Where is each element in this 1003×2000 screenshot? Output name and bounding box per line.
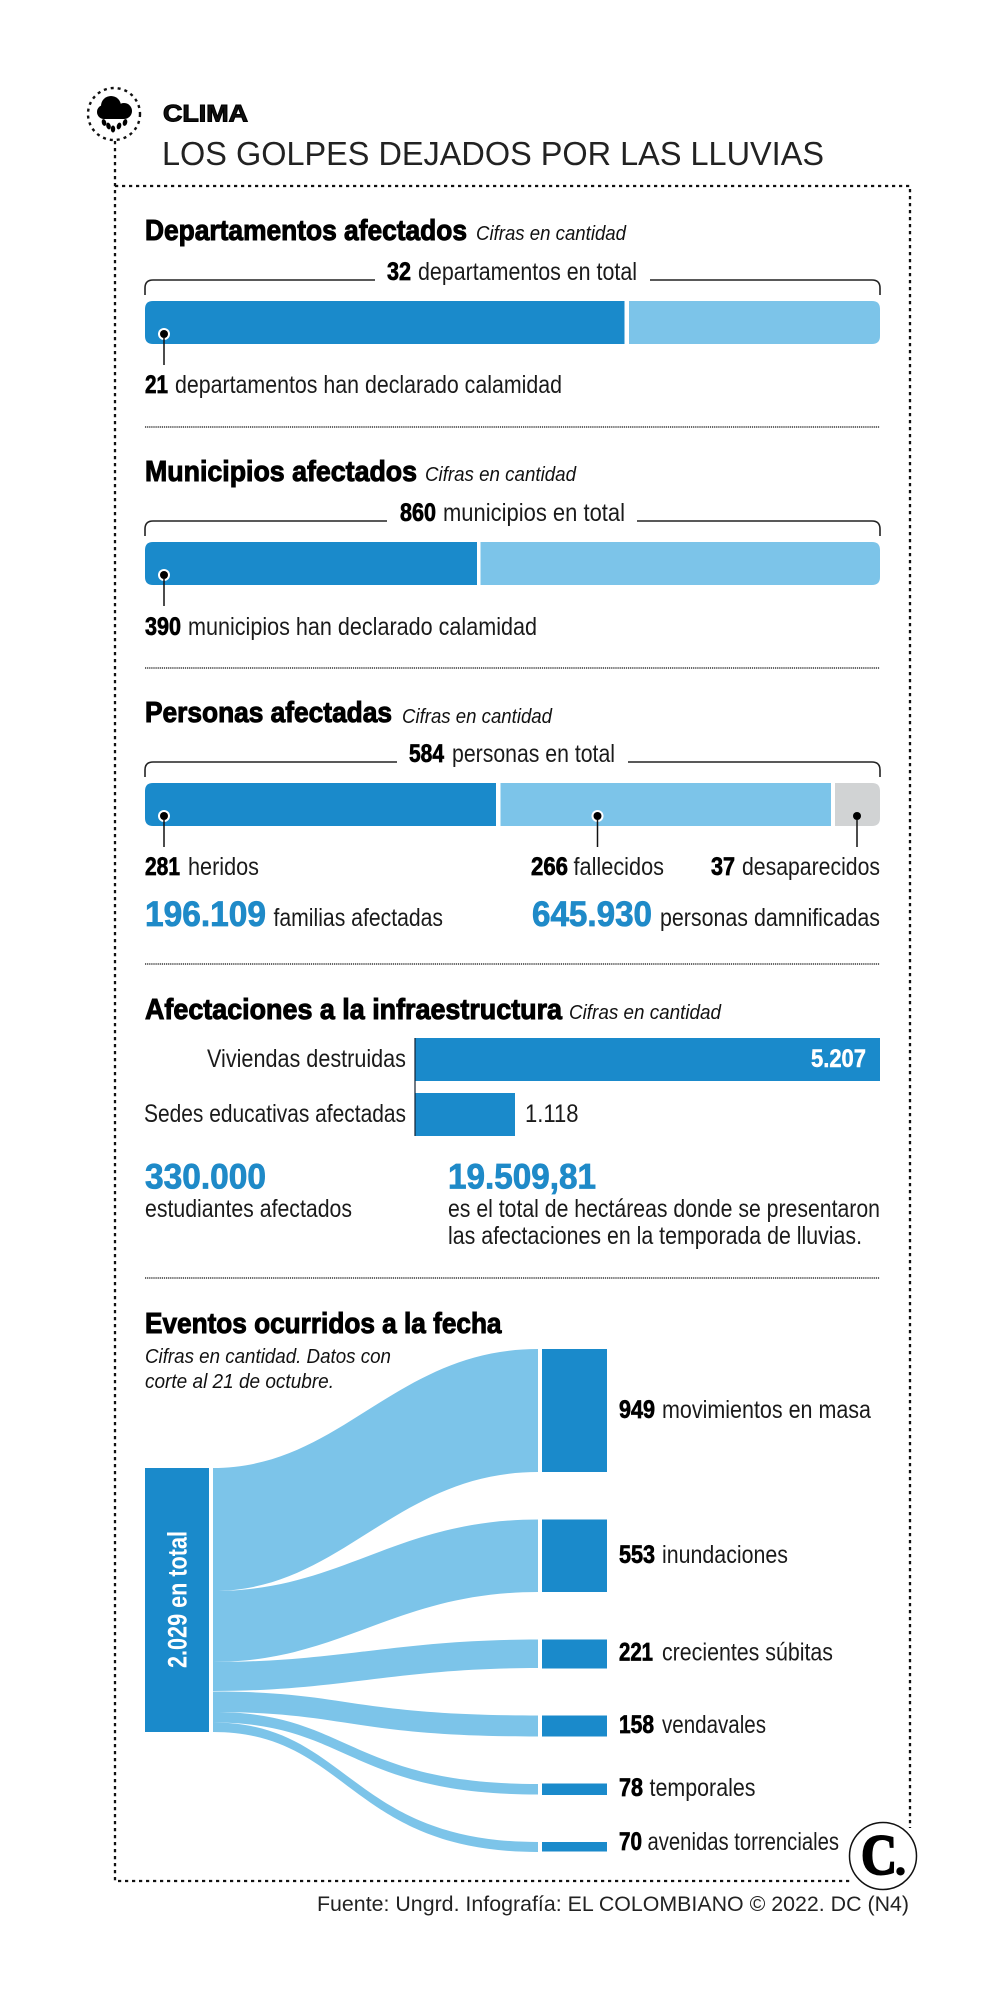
label: heridos: 281 [145,853,180,881]
target: crecientes subitas: crecientes súbitas [662,1638,833,1666]
stacked bar [145,783,880,826]
target: inundaciones: 553 [619,1541,655,1569]
total label: 860 [400,499,436,527]
bar chart: 5.207 [811,1045,866,1073]
logo [850,1822,916,1890]
target: inundaciones [542,1520,788,1592]
total label: personas en total [452,740,615,768]
panel: departamentos afectados [145,215,880,399]
note: Cifras en cantidad [402,706,553,728]
target: temporales: 78 [619,1774,643,1802]
source node [145,1468,209,1732]
label: heridos: heridos [188,853,259,881]
stat: hectareas [448,1158,880,1250]
target: temporales [542,1774,756,1802]
value label: 21 [145,371,168,399]
stat: damnificadas: personas damnificadas [660,904,880,932]
note: Cifras en cantidad [425,464,577,486]
target: movimientos en masa [542,1349,871,1472]
bar chart [144,1038,880,1136]
note [145,1346,391,1393]
stat: familias: 196.109 [145,895,266,934]
label: desaparecidos: desaparecidos [742,853,880,881]
bar chart: Sedes educativas afectadas [144,1100,406,1128]
title: LOS GOLPES DEJADOS POR LAS LLUVIAS [162,136,824,173]
logo: . [894,1830,907,1887]
note: corte al 21 de octubre. [145,1371,334,1393]
source node: 2.029 en total [162,1531,192,1668]
total label: municipios en total [443,499,625,527]
kicker: CLIMA [163,100,248,128]
target: avenidas torrenciales: avenidas torrenciales [648,1828,839,1856]
heading: Personas afectadas [145,697,392,729]
label: fallecidos: 266 [531,853,568,881]
marker [158,569,170,606]
stat: damnificadas [532,895,880,934]
stat: hectareas: es el total de hectáreas donde se presentaron [448,1195,880,1223]
value label: departamentos han declarado calamidad [175,371,562,399]
total label [409,740,615,768]
markers [158,810,861,847]
target: movimientos en masa: 949 [619,1396,655,1424]
target: avenidas torrenciales: 70 [619,1828,642,1856]
icon: rain cloud [88,88,140,140]
bar chart: Viviendas destruidas [207,1045,406,1073]
stat: estudiantes: 330.000 [145,1158,266,1196]
target: inundaciones: inundaciones [662,1541,788,1569]
target: vendavales: 158 [619,1711,654,1739]
target: crecientes subitas: 221 [619,1638,653,1666]
panel: infraestructura [144,994,880,1250]
stat: estudiantes: estudiantes afectados [145,1195,352,1223]
marker [158,328,170,365]
stat: hectareas: 19.509,81 [448,1158,596,1196]
value label: municipios han declarado calamidad [188,613,537,641]
value label: 390 [145,613,181,641]
source credit: Fuente: Ungrd. Infografía: EL COLOMBIANO © 2022. DC (N4) [317,1893,909,1916]
label: desaparecidos: 37 [711,853,735,881]
label: fallecidos: fallecidos [574,853,664,881]
heading: Eventos ocurridos a la fecha [145,1308,502,1340]
sankey flows [213,1349,538,1852]
panel: municipios afectados [145,456,880,641]
stacked bar [145,542,880,585]
note: Cifras en cantidad [476,223,627,245]
stat: familias [145,895,443,934]
total label: departamentos en total [418,258,637,286]
stat: familias: familias afectadas [274,904,443,932]
heading: Departamentos afectados [145,215,467,247]
stat: estudiantes [145,1158,352,1223]
panel: personas afectadas [145,697,880,934]
stacked bar [145,301,880,344]
heading: Afectaciones a la infraestructura [145,994,563,1026]
heading: Municipios afectados [145,456,417,488]
target: vendavales: vendavales [662,1711,766,1739]
stat: damnificadas: 645.930 [532,895,652,934]
total label: 584 [409,740,444,768]
panel: eventos [145,1308,871,1856]
stat: hectareas: las afectaciones en la temporada de lluvias. [448,1222,862,1250]
note: Cifras en cantidad [569,1002,722,1024]
note: Cifras en cantidad. Datos con [145,1346,391,1368]
target: crecientes subitas [542,1638,833,1668]
target: temporales: temporales [650,1774,756,1802]
target: vendavales [542,1711,766,1739]
label: fallecidos [531,853,664,881]
target: avenidas torrenciales [542,1828,839,1856]
logo: C [861,1824,897,1887]
bar chart: 1.118 [525,1100,578,1128]
total label: 32 [387,258,411,286]
label: heridos [145,853,259,881]
target: movimientos en masa: movimientos en masa [662,1396,871,1424]
